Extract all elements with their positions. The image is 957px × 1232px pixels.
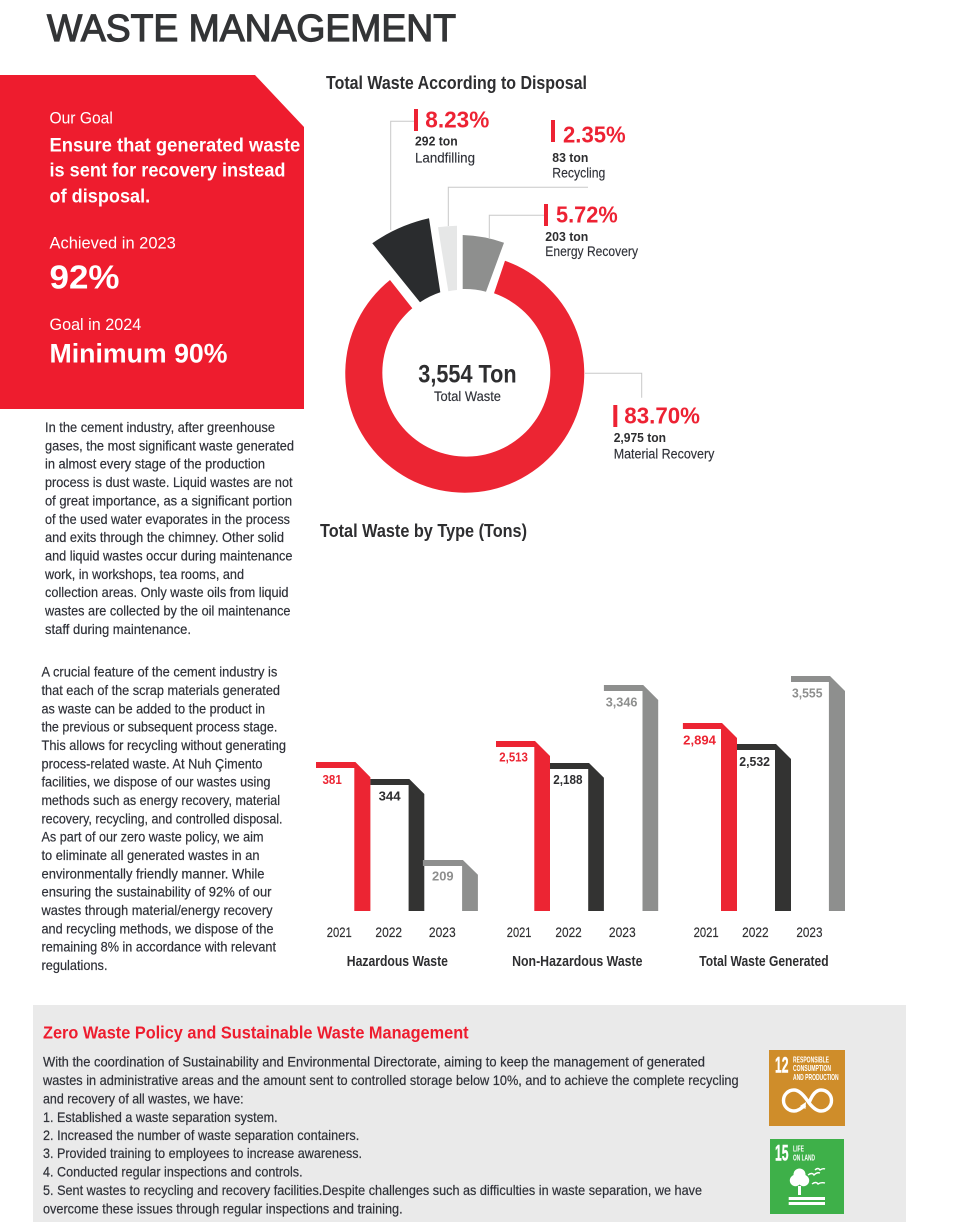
label: landfilling bbox=[414, 106, 489, 165]
label: landfilling: 8.23% bbox=[425, 106, 489, 132]
donut centre total: Total Waste bbox=[434, 388, 501, 404]
text block: recycling and zero waste bbox=[41, 664, 286, 973]
bar chart: total waste generated: 2,532 bbox=[739, 754, 770, 769]
text block: recycling and zero waste: as waste can be added to the product in bbox=[42, 700, 265, 716]
panel body text: wastes in administrative areas and the amount sent to controlled storage below 10%, and to achieve the complete recycling bbox=[42, 1072, 739, 1088]
text block: cement industry waste: of the used water evaporates in the process bbox=[45, 511, 290, 527]
bar chart: total waste generated bbox=[683, 676, 845, 970]
bar chart: non-hazardous waste: 2022 bbox=[555, 924, 582, 940]
heading: disposal chart: Total Waste According to Disposal bbox=[326, 73, 587, 93]
bar chart: hazardous waste: 2022 bbox=[375, 924, 402, 940]
icon: SDG 12 responsible consumption and production: 12 bbox=[775, 1052, 788, 1077]
text block: recycling and zero waste: As part of our zero waste policy, we aim bbox=[42, 829, 264, 845]
text block: recycling and zero waste: methods such as energy recovery, material bbox=[42, 792, 280, 808]
icon: SDG 15 life on land: ON LAND bbox=[793, 1152, 815, 1162]
panel body text: 4. Conducted regular inspections and controls. bbox=[43, 1164, 303, 1180]
text block: cement industry waste bbox=[44, 419, 294, 637]
label: energy recovery: 5.72% bbox=[556, 202, 618, 228]
bar chart: non-hazardous waste: 2023 bbox=[609, 924, 636, 940]
text block: cement industry waste: collection areas. Only waste oils from liquid bbox=[45, 584, 288, 600]
text block: cement industry waste: in almost every stage of the production bbox=[45, 456, 265, 472]
bar chart: hazardous waste: 381 bbox=[322, 772, 342, 787]
text block: recycling and zero waste: regulations. bbox=[42, 957, 108, 973]
text block: recycling and zero waste: process-related waste. At Nuh Çimento bbox=[42, 755, 263, 771]
panel body text: 3. Provided training to employees to increase awareness. bbox=[43, 1145, 362, 1161]
text block: recycling and zero waste: that each of the scrap materials generated bbox=[42, 682, 280, 698]
text block: cement industry waste: and liquid wastes occur during maintenance bbox=[45, 548, 293, 564]
panel body text bbox=[42, 1054, 739, 1216]
bar chart: non-hazardous waste: 2021 bbox=[507, 924, 532, 940]
target label: Goal in 2024 bbox=[50, 316, 141, 334]
donut chart: waste by disposal bbox=[345, 121, 642, 493]
panel body text: 2. Increased the number of waste separation containers. bbox=[43, 1127, 359, 1143]
text block: recycling and zero waste: recovery, recycling, and controlled disposal. bbox=[42, 810, 282, 826]
bar chart: hazardous waste: 209 bbox=[432, 869, 454, 884]
bar chart: non-hazardous waste: 2,513 bbox=[499, 750, 528, 765]
label: recycling bbox=[551, 120, 626, 180]
text block: recycling and zero waste: to eliminate all generated wastes in an bbox=[42, 847, 260, 863]
bar chart: total waste generated: 2022 bbox=[742, 924, 769, 940]
segment: recycling bbox=[438, 226, 457, 291]
text block: recycling and zero waste: and recycling methods, we dispose of the bbox=[42, 920, 274, 936]
bar chart: total waste generated: Total Waste Generated bbox=[699, 954, 829, 970]
text block: cement industry waste: wastes are collected by the oil maintenance bbox=[44, 603, 291, 619]
text block: recycling and zero waste: This allows for recycling without generating bbox=[42, 737, 286, 753]
goal statement: is sent for recovery instead bbox=[50, 160, 286, 182]
text block: cement industry waste: gases, the most significant waste generated bbox=[45, 437, 294, 453]
title: WASTE MANAGEMENT bbox=[47, 8, 456, 50]
panel: zero waste policy bbox=[33, 1005, 906, 1222]
label: recycling: 2.35% bbox=[563, 122, 626, 148]
text block: recycling and zero waste: A crucial feature of the cement industry is bbox=[42, 664, 277, 680]
donut centre total bbox=[418, 361, 517, 404]
donut centre total: 3,554 Ton bbox=[418, 361, 517, 389]
text block: recycling and zero waste: wastes through material/energy recovery bbox=[41, 902, 273, 918]
panel heading: Zero Waste Policy and Sustainable Waste Management bbox=[43, 1022, 469, 1042]
text block: recycling and zero waste: remaining 8% in accordance with relevant bbox=[42, 939, 276, 955]
bar chart: non-hazardous waste: 2,188 bbox=[553, 772, 582, 787]
bar chart: hazardous waste bbox=[316, 762, 478, 970]
segment: material recovery bbox=[345, 261, 584, 493]
heading: type chart: Total Waste by Type (Tons) bbox=[320, 521, 527, 541]
text block: cement industry waste: and exits through the chimney. Other solid bbox=[45, 529, 284, 545]
label: energy recovery bbox=[544, 202, 638, 259]
panel: goal bbox=[0, 75, 304, 409]
bar chart: hazardous waste: 344 bbox=[379, 789, 401, 804]
label: energy recovery: Energy Recovery bbox=[545, 243, 638, 259]
achieved label: Achieved in 2023 bbox=[50, 234, 176, 252]
bar chart: total waste generated: 3,555 bbox=[792, 686, 822, 701]
achieved value: 92% bbox=[50, 258, 120, 295]
bar chart: hazardous waste: 2023 bbox=[429, 924, 456, 940]
goal heading: Our Goal bbox=[50, 109, 113, 127]
text block: cement industry waste: staff during maintenance. bbox=[45, 621, 191, 637]
bar chart: non-hazardous waste bbox=[496, 685, 658, 970]
icon: SDG 12 responsible consumption and production bbox=[769, 1050, 845, 1126]
bar chart: total waste generated: 2021 bbox=[694, 924, 719, 940]
goal statement bbox=[50, 135, 300, 207]
goal statement: of disposal. bbox=[50, 185, 150, 207]
label: material recovery bbox=[613, 402, 714, 461]
icon: SDG 12 responsible consumption and production: AND PRODUCTION bbox=[793, 1072, 839, 1082]
bar chart: hazardous waste: 2021 bbox=[327, 924, 352, 940]
text block: cement industry waste: work, in workshops, tea rooms, and bbox=[44, 566, 244, 582]
icon: SDG 12 responsible consumption and production: CONSUMPTION bbox=[793, 1063, 831, 1073]
panel body text: 5. Sent wastes to recycling and recovery facilities.Despite challenges such as difficulties in waste separation, we have bbox=[43, 1182, 702, 1198]
label: landfilling: Landfilling bbox=[415, 149, 475, 165]
label: material recovery: 83.70% bbox=[624, 402, 700, 428]
bar chart: non-hazardous waste: Non-Hazardous Waste bbox=[512, 954, 642, 970]
text block: recycling and zero waste: the previous or subsequent process stage. bbox=[42, 719, 277, 735]
target value: Minimum 90% bbox=[50, 339, 228, 369]
icon: SDG 12 responsible consumption and production: RESPONSIBLE bbox=[793, 1054, 829, 1064]
text block: cement industry waste: process is dust waste. Liquid wastes are not bbox=[45, 474, 293, 490]
panel body text: 1. Established a waste separation system. bbox=[43, 1109, 278, 1125]
bar chart: total waste generated: 2023 bbox=[796, 924, 823, 940]
label: recycling: 83 ton bbox=[552, 151, 588, 165]
icon: SDG 15 life on land: 15 bbox=[775, 1141, 788, 1166]
text block: recycling and zero waste: environmentally friendly manner. While bbox=[42, 865, 265, 881]
bar chart: total waste generated: 2,894 bbox=[683, 733, 717, 748]
bar chart: hazardous waste: Hazardous Waste bbox=[347, 954, 448, 970]
panel body text: overcome these issues through regular inspections and training. bbox=[43, 1200, 403, 1216]
text block: recycling and zero waste: facilities, we dispose of our wastes using bbox=[42, 774, 270, 790]
label: landfilling: 292 ton bbox=[415, 135, 458, 149]
text block: recycling and zero waste: ensuring the sustainability of 92% of our bbox=[42, 884, 272, 900]
icon: SDG 15 life on land bbox=[770, 1139, 844, 1214]
panel body text: and recovery of all wastes, we have: bbox=[43, 1090, 244, 1106]
icon: SDG 15 life on land: LIFE bbox=[793, 1144, 804, 1154]
panel body text: With the coordination of Sustainability and Environmental Directorate, aiming to keep the management of generated bbox=[43, 1054, 705, 1070]
label: material recovery: Material Recovery bbox=[614, 445, 714, 461]
label: recycling: Recycling bbox=[552, 164, 605, 180]
label: energy recovery: 203 ton bbox=[545, 230, 588, 244]
bar chart: non-hazardous waste: 3,346 bbox=[606, 695, 638, 710]
text block: cement industry waste: of great importance, as a significant portion bbox=[45, 492, 292, 508]
label: material recovery: 2,975 ton bbox=[614, 431, 666, 445]
text block: cement industry waste: In the cement industry, after greenhouse bbox=[45, 419, 275, 435]
goal statement: Ensure that generated waste bbox=[50, 135, 300, 157]
segment: energy recovery bbox=[463, 235, 504, 292]
segment: landfilling bbox=[372, 218, 440, 302]
